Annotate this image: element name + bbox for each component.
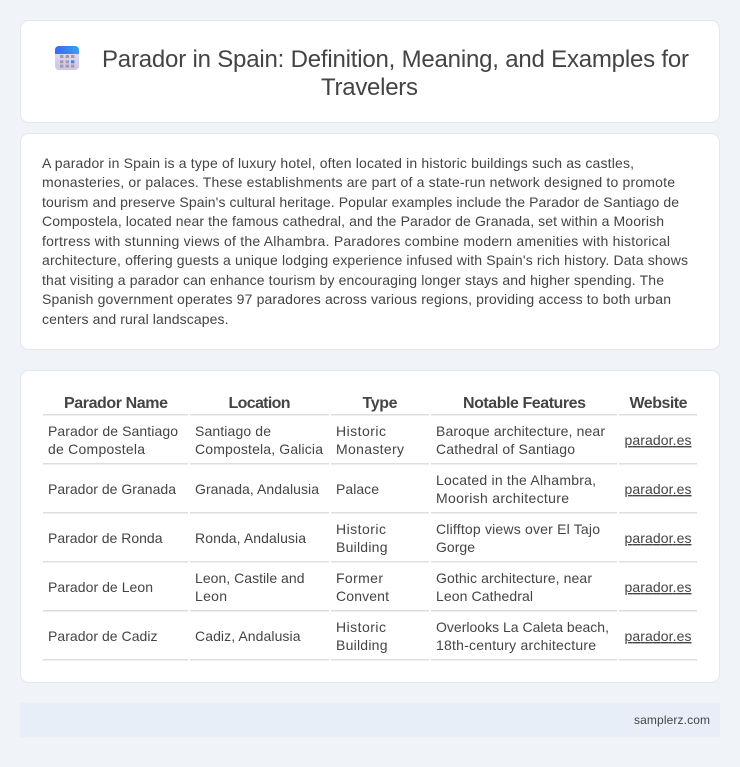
table header row: Type	[362, 395, 398, 412]
row: Leon: Parador de Leon	[48, 579, 153, 595]
row: Santiago: Cathedral of Santiago	[436, 441, 575, 457]
panel: title card	[20, 20, 720, 122]
table header row: Notable Features	[463, 395, 586, 412]
row: Leon: Convent	[336, 588, 389, 604]
row: Ronda: Clifftop views over El Tajo	[436, 521, 600, 537]
row: Granada: Moorish architecture	[436, 490, 569, 506]
row: Ronda: Historic	[336, 521, 386, 537]
row: Leon: Leon Cathedral	[436, 588, 533, 604]
row: Ronda: Building	[336, 539, 388, 555]
text block: description paragraph: monasteries, or palaces. These establishments are part of a state-run network designed to promote	[42, 174, 675, 190]
row: Ronda: Gorge	[436, 539, 475, 555]
row: Santiago: de Compostela	[48, 441, 145, 457]
footer	[20, 703, 720, 737]
row: Cadiz: 18th-century architecture	[436, 637, 596, 653]
table header row: Parador Name	[64, 395, 168, 412]
row: Santiago: Monastery	[336, 441, 404, 457]
row: Cadiz	[48, 619, 692, 653]
row: Leon: Gothic architecture, near	[436, 570, 592, 586]
row: Santiago: Baroque architecture, near	[436, 423, 605, 439]
table header row: Website	[630, 395, 688, 412]
text block: description paragraph: Compostela, located near the famous cathedral, and the Parador de Granada, set within a Moorish	[42, 213, 664, 229]
panel: description	[20, 134, 720, 350]
table header row: Location	[228, 395, 290, 412]
table: paradors	[43, 395, 697, 660]
row: Ronda: Ronda, Andalusia	[195, 530, 306, 546]
row: Granada: parador.es	[624, 481, 692, 497]
title: Travelers	[321, 74, 418, 101]
row: Cadiz: Historic	[336, 619, 386, 635]
text block: description paragraph: architecture, offering guests a unique lodging experience infused with Spain's rich history. Data shows	[42, 252, 688, 268]
row: Cadiz: Building	[336, 637, 388, 653]
text block: description paragraph: fortress with stunning views of the Alhambra. Paradores combine modern amenities with historical	[42, 233, 670, 249]
text block: description paragraph: tourism and preserve Spain's cultural heritage. Popular examples include the Parador de Santiago de	[42, 194, 679, 210]
row: Granada: Palace	[336, 481, 379, 497]
row: Granada	[48, 472, 692, 506]
row: Granada: Located in the Alhambra,	[436, 472, 596, 488]
text block: description paragraph: centers and rural landscapes.	[42, 311, 228, 327]
row: Santiago: Parador de Santiago	[48, 423, 178, 439]
row: Santiago: Santiago de	[195, 423, 271, 439]
title	[102, 46, 689, 101]
row: Cadiz: parador.es	[624, 628, 692, 644]
icon: calendar	[55, 46, 79, 70]
row: Leon: Leon	[195, 588, 227, 604]
row: Santiago: Compostela, Galicia	[195, 441, 323, 457]
row: Cadiz: Parador de Cadiz	[48, 628, 158, 644]
text block: description paragraph: A parador in Spain is a type of luxury hotel, often located in historic buildings such as castles,	[42, 155, 634, 171]
text block: description paragraph: that visiting a parador can enhance tourism by encouraging longer stays and higher spending. The	[42, 272, 664, 288]
panel: table card	[20, 370, 720, 682]
row: Ronda: parador.es	[624, 530, 692, 546]
row: Leon: Leon, Castile and	[195, 570, 304, 586]
title: Parador in Spain: Definition, Meaning, and Examples for	[102, 46, 689, 73]
footer text: samplerz.com	[634, 713, 710, 727]
row: Granada: Granada, Andalusia	[195, 481, 319, 497]
row: Granada: Parador de Granada	[48, 481, 176, 497]
text block: description paragraph: Spanish government operates 97 paradores across various regions, providing access to both urban	[42, 291, 671, 307]
row: Leon	[48, 570, 692, 604]
table header row	[64, 395, 688, 412]
row: Santiago: Historic	[336, 423, 386, 439]
row: Cadiz: Overlooks La Caleta beach,	[436, 619, 609, 635]
row: Leon: Former	[336, 570, 383, 586]
row: Ronda: Parador de Ronda	[48, 530, 163, 546]
row: Cadiz: Cadiz, Andalusia	[195, 628, 301, 644]
text block: description paragraph	[42, 155, 688, 327]
row: Santiago	[48, 423, 692, 457]
row: Leon: parador.es	[624, 579, 692, 595]
row: Santiago: parador.es	[624, 432, 692, 448]
row: Ronda	[48, 521, 692, 555]
